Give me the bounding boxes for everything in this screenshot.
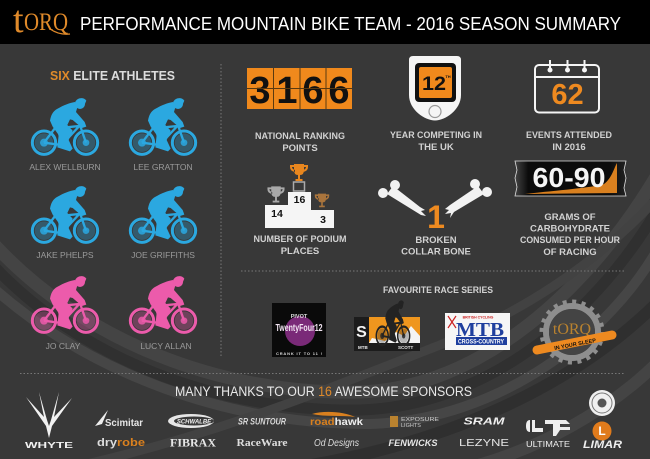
panel: sponsors [25, 384, 622, 451]
stat: carbohydrate [515, 161, 626, 258]
icon: calendar 62: 62 [551, 79, 584, 111]
logo: Fibrax: FIBRAX [170, 436, 216, 450]
logo: British Cycling MTB cross-country: CROSS-COUNTRY [458, 340, 504, 346]
stat: carbohydrate: GRAMS OF [544, 212, 596, 223]
stat: national ranking points: NATIONAL RANKING [255, 131, 345, 142]
stat: podium places [254, 164, 347, 257]
athlete: Lee Gratton: LEE GRATTON [133, 162, 193, 172]
logo: Limar [583, 422, 622, 451]
logo: Schwalbe [168, 414, 214, 428]
icon: bike computer: 12 [422, 74, 446, 95]
athlete: Jake Phelps [32, 186, 98, 260]
flip board 3166: 6 [302, 70, 324, 112]
logo: British Cycling MTB cross-country [445, 313, 510, 350]
heading: sponsors: MANY THANKS TO OUR 16 AWESOME SPONSORS [175, 384, 472, 399]
stat: events attended: IN 2016 [552, 142, 586, 153]
logo: Torq in your sleep [537, 302, 612, 362]
stat: year competing in the UK: YEAR COMPETING IN [390, 130, 482, 141]
logo: Torq [13, 0, 70, 41]
logo: Scimitar [95, 410, 143, 429]
logo: SRAM: SRAM [464, 416, 505, 428]
logo: MTB Scott series: SCOTT [398, 345, 414, 350]
logo: Twentyfour12 [272, 303, 326, 357]
logo: Torq: t [13, 0, 24, 41]
flip board 3166: 3 [249, 70, 271, 112]
logo: MTB Scott series [354, 300, 420, 351]
athlete: Lucy Allan: LUCY ALLAN [140, 341, 192, 351]
athlete: Jo Clay: JO CLAY [46, 341, 81, 351]
logo: Od Designs: Od Designs [314, 438, 359, 449]
heading: six elite athletes: SIX ELITE ATHLETES [50, 69, 175, 83]
icon: podium with trophies [265, 164, 334, 228]
logo: Twentyfour12: TwentyFour12 [276, 322, 323, 334]
stat: carbohydrate: OF RACING [543, 247, 597, 258]
logo: Torq: ORQ [24, 9, 68, 36]
logo: SR Suntour: SR SUNTOUR [238, 416, 286, 428]
logo: Fenwicks: FENWICKS [388, 438, 438, 448]
athlete: Joe Griffiths: JOE GRIFFITHS [131, 250, 195, 260]
logo: Torq in your sleep: IN YOUR SLEEP [554, 338, 597, 352]
number 1: 1 [427, 199, 445, 235]
athlete: Alex Wellburn [29, 98, 101, 172]
logo: roundel [589, 390, 615, 416]
icon: broken bone [378, 179, 492, 218]
logo: Schwalbe: SCHWALBE [177, 420, 212, 426]
logo: Scimitar: Scimitar [105, 417, 143, 429]
logo: British Cycling MTB cross-country: BRITISH CYCLING [463, 316, 494, 320]
background swooshes [0, 170, 650, 459]
athlete: Jo Clay [32, 276, 98, 351]
icon: podium with trophies: 14 [271, 208, 283, 220]
flip board 3166: 6 [328, 70, 350, 112]
icon: podium with trophies: 16 [294, 194, 305, 206]
stat: events attended [526, 60, 612, 153]
gel banner 60-90: 60-90 [532, 162, 606, 193]
logo: Ultimate: ULTIMATE [526, 440, 570, 449]
panel: favourite race series [272, 285, 612, 362]
logo: Limar: L [598, 424, 606, 438]
athlete: Lee Gratton [130, 98, 196, 172]
icon: bike computer: TH [445, 74, 451, 79]
stat: national ranking points [247, 68, 352, 154]
stat: year competing in the UK: THE UK [418, 142, 454, 153]
logo: Whyte [25, 392, 74, 450]
icon: bike computer [409, 56, 461, 120]
stat: broken collar bone: BROKEN [415, 235, 457, 246]
logo: Exposure Lights [390, 416, 439, 429]
logo: Exposure Lights: LIGHTS [401, 423, 421, 429]
logo: MTB Scott series: S [356, 324, 367, 341]
panel: athletes [29, 69, 196, 351]
stat: broken collar bone: COLLAR BONE [401, 246, 471, 258]
logo: RaceWare: RaceWare [236, 438, 288, 449]
logo: Limar: LIMAR [583, 439, 622, 451]
athlete: Jake Phelps: JAKE PHELPS [36, 250, 94, 260]
flip board 3166: 1 [276, 70, 298, 112]
logo: MTB Scott series: MTB [358, 345, 368, 350]
stat: podium places: PLACES [281, 246, 319, 257]
header bar [0, 0, 650, 44]
flip board 3166 [247, 68, 352, 112]
logo: Whyte: WHYTE [25, 441, 74, 450]
stat: carbohydrate: CARBOHYDRATE [530, 224, 610, 234]
logo: Torq in your sleep: tORQ [553, 321, 592, 338]
stat: events attended: EVENTS ATTENDED [526, 130, 612, 141]
logo: British Cycling MTB cross-country: MTB [456, 319, 504, 341]
logo: Twentyfour12: PIVOT [291, 314, 308, 320]
logo: Exposure Lights: EXPOSURE [401, 417, 439, 423]
logo: Twentyfour12: CRANK IT TO 11 ! [276, 351, 322, 356]
stat: carbohydrate: CONSUMED PER HOUR [520, 235, 620, 246]
stat: year competing in the UK [390, 56, 482, 153]
stat: podium places: NUMBER OF PODIUM [254, 234, 347, 245]
heading: favourite race series: FAVOURITE RACE SERIES [383, 285, 493, 296]
athlete: Alex Wellburn: ALEX WELLBURN [29, 162, 101, 172]
logo: Ultimate [526, 420, 570, 449]
stat: broken collar bone [378, 179, 492, 258]
stat: national ranking points: POINTS [282, 143, 318, 154]
dotted divider: vertical [220, 64, 222, 358]
dotted divider: stats [241, 270, 626, 272]
icon: podium with trophies: 3 [320, 214, 326, 226]
logo: Lezyne: LEZYNE [459, 438, 509, 449]
athlete: Lucy Allan [130, 276, 196, 351]
dotted divider: sponsors [20, 372, 624, 374]
athlete: Joe Griffiths [130, 186, 196, 260]
logo: dryrobe: dry robe [97, 437, 145, 449]
logo: Roadhawk: roadhawk [310, 416, 363, 428]
